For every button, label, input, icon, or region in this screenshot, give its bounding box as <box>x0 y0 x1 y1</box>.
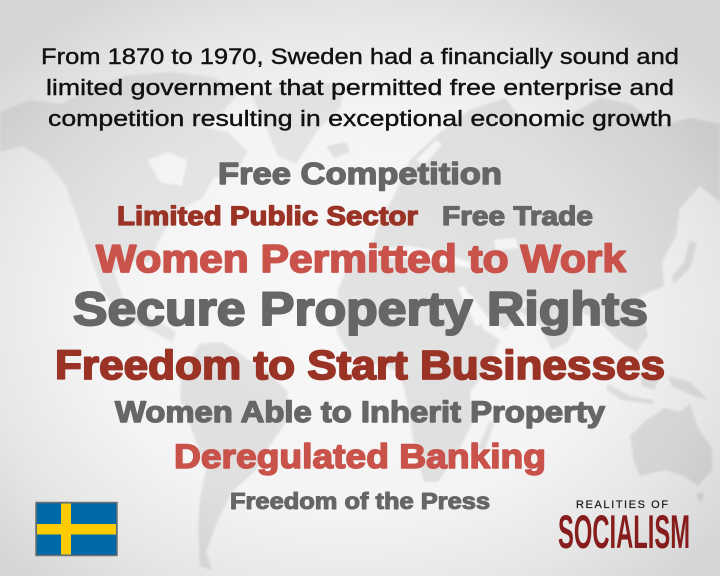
map: Africa <box>336 250 500 482</box>
icon: Swedish flag <box>36 502 117 556</box>
term: Free Competition: Free Competition <box>218 156 502 191</box>
term: Freedom to Start Businesses: Freedom to Start Businesses <box>55 342 665 388</box>
map: New Guinea <box>668 376 708 400</box>
intro text: From 1870 to 1970, Sweden had a financially sound and <box>41 44 679 69</box>
term: Deregulated Banking: Deregulated Banking <box>174 438 546 476</box>
logo: Realities of Socialism: REALITIES OF <box>576 499 668 511</box>
map: South America <box>180 342 288 570</box>
map: North America <box>0 72 248 342</box>
map: Iceland <box>326 142 350 158</box>
intro text: competition resulting in exceptional economic growth <box>48 106 672 131</box>
term: Women Permitted to Work: Women Permitted to Work <box>96 238 626 281</box>
map: Tasmania <box>697 493 704 502</box>
word cloud <box>55 156 665 514</box>
map: Europe and Asia <box>370 98 720 352</box>
term: Secure Property Rights: Secure Property Rights <box>73 282 648 335</box>
term: Free Trade: Free Trade <box>442 201 593 231</box>
intro text <box>41 44 679 131</box>
intro text: limited government that permitted free enterprise and <box>46 75 674 100</box>
map: Greenland <box>252 84 345 164</box>
map: Australia <box>630 404 712 486</box>
term: Limited Public Sector: Limited Public Sector <box>117 201 419 231</box>
map: Japan <box>672 240 697 284</box>
term: Women Able to Inherit Property: Women Able to Inherit Property <box>115 396 605 429</box>
term: Freedom of the Press: Freedom of the Press <box>230 488 490 514</box>
map: Indonesia <box>606 372 660 404</box>
map: inland seas <box>370 140 528 326</box>
map: Madagascar <box>478 420 494 452</box>
